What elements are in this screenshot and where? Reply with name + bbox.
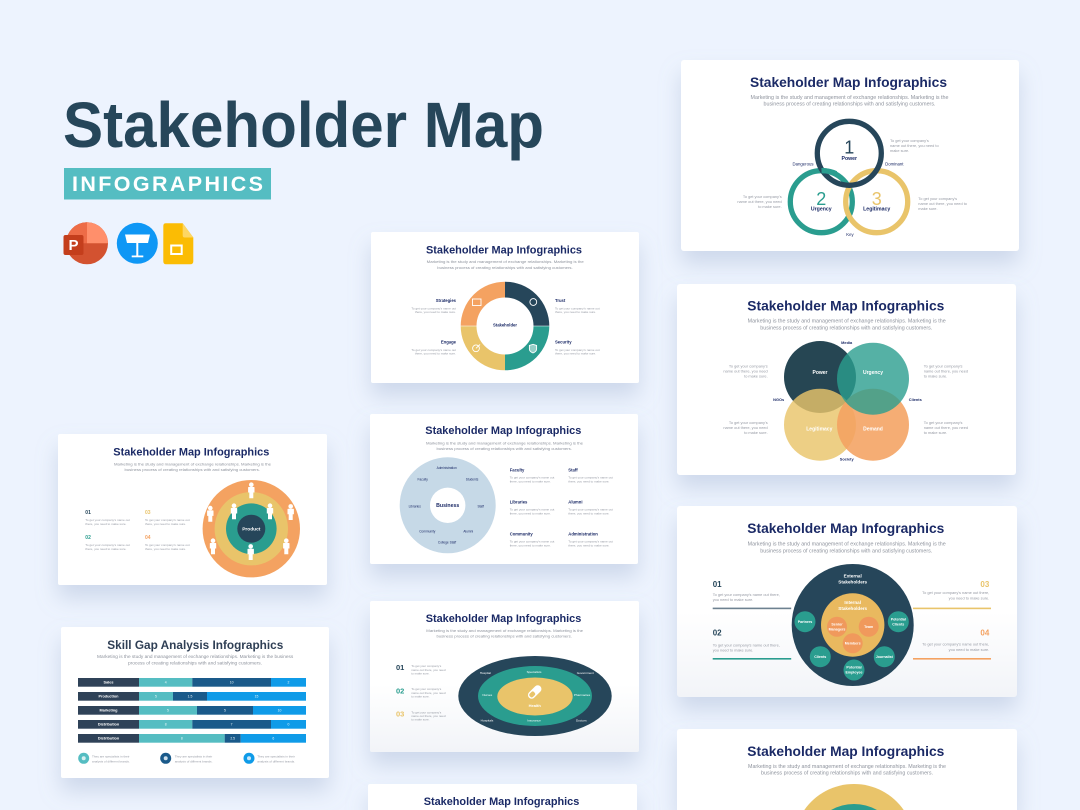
notes: To get your company's xyxy=(918,196,957,201)
item 02: you need to make sure. xyxy=(713,648,753,653)
heading: Stakeholder Map Infographics xyxy=(424,796,579,808)
item 03: you need to make sure. xyxy=(949,596,989,600)
stacked bars: 5 xyxy=(155,695,157,699)
nested ellipses: Government xyxy=(577,671,594,675)
nested circle chart: Partners xyxy=(798,620,812,624)
numbered list xyxy=(396,663,446,722)
donut notes: there, you need to make sure. xyxy=(555,310,596,314)
stacked bars: Marketing xyxy=(100,709,118,713)
stacked bars: 1.5 xyxy=(188,695,192,699)
ring labels: Key xyxy=(846,232,855,237)
legend: analysis of different brands. xyxy=(175,759,213,763)
stacked bars: Distribution xyxy=(98,723,120,727)
stacked bars: Sales xyxy=(104,681,113,685)
ring labels: 2 xyxy=(816,189,826,209)
numbered list: name out there, you need xyxy=(411,691,446,695)
ring labels: Urgency xyxy=(811,206,832,212)
description: business process of creating relationships with and satisfying customers. xyxy=(436,633,572,638)
nested circle chart: Internal xyxy=(844,600,861,605)
stacked bars: Production xyxy=(98,695,119,699)
legend xyxy=(78,753,295,764)
nested circle chart: Clients xyxy=(814,655,826,659)
panel: health ellipses xyxy=(370,601,639,752)
heading: Stakeholder Map Infographics xyxy=(747,520,944,536)
description xyxy=(748,319,946,332)
donut notes: To get your company's name out xyxy=(411,348,456,352)
ring labels: Dominant xyxy=(885,162,904,166)
stakeholder list: Alumni xyxy=(568,500,583,505)
numbered list: to make sure. xyxy=(411,671,430,675)
heading: Stakeholder Map Infographics xyxy=(113,446,269,458)
subtitle badge: INFOGRAPHICS xyxy=(72,172,263,196)
description: Marketing is the study and management of exchange relationships. Marketing is the xyxy=(748,764,946,770)
nested circle chart: Senior xyxy=(831,622,843,626)
concentric circles xyxy=(804,784,904,810)
numbered items: 02 xyxy=(85,535,91,541)
stacked bars: 5 xyxy=(167,709,169,713)
notes: name out there, you need xyxy=(924,368,968,374)
numbered list: name out there, you need xyxy=(411,668,446,672)
ring labels xyxy=(792,138,904,237)
description xyxy=(748,764,946,776)
legend: They are specialists in their xyxy=(92,754,130,758)
heading: Stakeholder Map Infographics xyxy=(426,244,582,256)
heading: Stakeholder Map Infographics xyxy=(747,298,944,314)
numbered items: 04 xyxy=(145,535,151,541)
donut labels: Engage xyxy=(441,340,457,344)
item 02: 02 xyxy=(713,629,722,638)
stakeholder list: Administration xyxy=(568,531,598,536)
panel: donut diagram xyxy=(371,232,639,383)
nested circle chart: Team xyxy=(864,625,873,629)
panel: skill gap bars xyxy=(61,627,329,778)
notes xyxy=(723,364,968,435)
stacked bars: 2.5 xyxy=(230,737,235,741)
stacked bars: 2 xyxy=(288,681,290,685)
notes: name out there, you need xyxy=(723,368,768,374)
panel: cropped bottom centre slide xyxy=(368,784,637,810)
description: business process of creating relationships with and satisfying customers. xyxy=(764,102,936,108)
stakeholder list: To get your company's name out xyxy=(510,507,554,511)
notes: name out there, you need xyxy=(737,199,782,204)
numbered items xyxy=(85,510,190,551)
notes: to make sure. xyxy=(744,430,768,435)
nested circle chart: Stakeholders xyxy=(838,606,868,611)
donut labels xyxy=(436,298,572,344)
notes: to make sure. xyxy=(924,430,947,435)
nested ellipses: Hospital xyxy=(480,671,491,675)
stakeholder list: there, you need to make sure. xyxy=(510,479,551,483)
description: Marketing is the study and management of exchange relationships. Marketing is the xyxy=(427,259,585,264)
description: Marketing is the study and management of exchange relationships. Marketing is the xyxy=(750,95,949,101)
numbered list: To get your company's xyxy=(411,687,442,691)
icon: pill xyxy=(526,684,543,700)
notes: name out there, you need to xyxy=(890,143,939,148)
item 03: 03 xyxy=(980,580,990,589)
icon: PowerPoint xyxy=(64,222,108,264)
notes: To get your company's xyxy=(743,194,782,199)
stacked bars: 15 xyxy=(255,695,258,699)
donut notes xyxy=(411,306,600,356)
notes: To get your company's xyxy=(924,364,963,368)
icon: PowerPoint: P xyxy=(68,237,79,254)
numbered items: To get your company's name out xyxy=(85,518,130,522)
venn labels: Demand xyxy=(863,426,883,432)
notes: To get your company's xyxy=(729,420,768,425)
numbered items: there, you need to make sure. xyxy=(145,547,186,551)
concentric rings xyxy=(203,480,300,577)
wheel: College Staff xyxy=(438,540,456,544)
stacked bars: 8 xyxy=(165,723,167,727)
venn labels: Media xyxy=(841,340,853,345)
nested circle chart: Members xyxy=(845,642,861,646)
venn circles xyxy=(784,341,909,461)
item 03: To get your company's name out there, xyxy=(922,590,989,595)
stakeholder list: there, you need to make sure. xyxy=(568,479,610,483)
nested circle chart: Potential xyxy=(891,618,906,622)
description xyxy=(427,259,585,270)
ring labels: Power xyxy=(842,156,857,162)
notes: To get your company's xyxy=(890,138,929,143)
description: business process of creating relationships with and satisfying customers. xyxy=(124,467,260,472)
ring labels: Dangerous xyxy=(792,162,814,166)
description: process of creating relationships with and satisfying customers. xyxy=(128,660,262,665)
stakeholder list: To get your company's name out xyxy=(510,475,554,479)
stakeholder list: To get your company's name out xyxy=(568,475,613,479)
description xyxy=(97,654,293,665)
description: business process of creating relationships with and satisfying customers. xyxy=(437,265,573,270)
stakeholder list: Faculty xyxy=(510,467,525,472)
nested circle chart: Stakeholders xyxy=(838,580,868,585)
venn labels: Society xyxy=(840,456,854,462)
description: Marketing is the study and management of exchange relationships. Marketing is the xyxy=(426,440,584,445)
panel: three ring diagram xyxy=(681,60,1019,251)
donut notes: To get your company's name out xyxy=(555,306,600,310)
donut chart xyxy=(460,290,550,362)
stakeholder list xyxy=(510,467,613,547)
ring labels: 3 xyxy=(872,189,882,209)
wheel xyxy=(400,457,496,553)
stakeholder list: Community xyxy=(510,531,533,536)
description xyxy=(426,440,584,451)
nested circle chart xyxy=(792,564,914,686)
description xyxy=(114,462,272,472)
description: Marketing is the study and management of exchange relationships. Marketing is the xyxy=(748,319,946,325)
donut labels: Security xyxy=(555,340,572,344)
venn labels: NGOs xyxy=(773,397,784,402)
panel: nested stakeholders xyxy=(677,506,1017,697)
numbered list: to make sure. xyxy=(411,695,430,699)
stakeholder list: Libraries xyxy=(510,500,528,505)
description: Marketing is the study and management of exchange relationships. Marketing is the xyxy=(426,628,584,633)
stakeholder list: To get your company's name out xyxy=(568,507,613,511)
description xyxy=(426,628,584,638)
stakeholder list: To get your company's name out xyxy=(510,539,554,543)
heading: Stakeholder Map Infographics xyxy=(426,613,581,625)
wheel: Alumni xyxy=(463,530,473,534)
item 02 xyxy=(713,629,791,660)
numbered items: To get your company's name out xyxy=(85,543,130,547)
donut notes: To get your company's name out xyxy=(411,306,456,310)
wheel: Libraries xyxy=(409,504,421,508)
donut notes: there, you need to make sure. xyxy=(415,310,456,314)
heading: Stakeholder Map Infographics xyxy=(750,74,947,90)
nested circle chart: External xyxy=(844,574,862,578)
notes: make sure. xyxy=(890,148,909,153)
notes xyxy=(737,138,967,211)
donut notes: To get your company's name out xyxy=(555,348,600,352)
numbered list: To get your company's xyxy=(411,710,442,714)
stacked bars: Distribution xyxy=(98,737,120,741)
nested circle chart: Potential xyxy=(846,666,862,670)
ring labels: 1 xyxy=(844,138,854,158)
stakeholder list: there, you need to make sure. xyxy=(510,511,551,515)
notes: To get your company's xyxy=(924,420,963,425)
donut labels: Strategies xyxy=(436,298,457,303)
item 04: 04 xyxy=(980,629,990,638)
stakeholder list: To get your company's name out xyxy=(568,539,613,543)
wheel: Administration xyxy=(437,466,457,470)
description: business process of creating relationships with and satisfying customers. xyxy=(760,548,932,554)
item 01: you need to make sure. xyxy=(713,597,753,602)
donut notes: there, you need to make sure. xyxy=(415,352,456,356)
numbered list: To get your company's xyxy=(411,664,442,668)
wheel: Staff xyxy=(477,504,484,508)
stakeholder list: there, you need to make sure. xyxy=(510,543,551,547)
nested ellipses xyxy=(458,656,612,736)
heading: Skill Gap Analysis Infographics xyxy=(107,638,284,652)
main title: Stakeholder Map xyxy=(63,89,544,161)
stacked bars: 8 xyxy=(181,737,183,741)
nested ellipses: Nurses xyxy=(482,693,493,697)
donut labels: Stakeholder xyxy=(493,322,517,327)
item 02: To get your company's name out there, xyxy=(713,643,780,648)
stakeholder list: there, you need to make sure. xyxy=(568,543,610,547)
donut notes: there, you need to make sure. xyxy=(555,352,596,356)
stacked bars: 10 xyxy=(230,681,234,685)
description xyxy=(748,542,946,554)
panel: business wheel xyxy=(370,414,638,564)
description xyxy=(750,95,949,108)
stacked bars: 6 xyxy=(272,737,274,741)
numbered items: there, you need to make sure. xyxy=(85,522,127,526)
donut icons xyxy=(472,299,537,353)
notes: name out there, you need to xyxy=(918,201,967,206)
notes: name out there, you need xyxy=(723,425,768,430)
legend: They are specialists in their xyxy=(175,754,212,758)
nested ellipses: Specialists xyxy=(527,670,542,674)
numbered items: To get your company's name out xyxy=(145,518,190,522)
numbered list: to make sure. xyxy=(411,718,430,722)
numbered items: To get your company's name out xyxy=(145,543,190,547)
item 04: To get your company's name out there, xyxy=(922,642,989,647)
notes: to make sure. xyxy=(924,374,947,378)
heading: Stakeholder Map Infographics xyxy=(425,425,581,437)
concentric rings: Product xyxy=(242,526,261,532)
item 03 xyxy=(913,580,991,609)
nested ellipses: Health xyxy=(529,703,541,708)
description: business process of creating relationships with and satisfying customers. xyxy=(761,770,933,776)
rings xyxy=(790,121,908,233)
item 01 xyxy=(713,580,791,609)
nested circle chart: Clients xyxy=(892,623,904,627)
description: business process of creating relationships with and satisfying customers. xyxy=(760,326,932,332)
item 01: 01 xyxy=(713,580,722,589)
venn labels: Power xyxy=(812,370,828,376)
venn labels: Urgency xyxy=(863,370,883,376)
notes: name out there, you need xyxy=(924,425,968,430)
notes: to make sure. xyxy=(758,204,782,209)
donut labels: Trust xyxy=(555,298,566,303)
venn labels: Legitimacy xyxy=(806,426,833,432)
numbered list: 01 xyxy=(396,663,404,672)
description: business process of creating relationships with and satisfying customers. xyxy=(436,446,572,451)
legend: analysis of different brands. xyxy=(257,759,295,763)
item 04 xyxy=(913,629,991,660)
nested circle chart: Journalist xyxy=(876,655,894,659)
wheel: Community xyxy=(419,530,436,534)
item 04: you need to make sure. xyxy=(949,647,989,652)
numbered items: 01 xyxy=(85,510,91,516)
heading: Stakeholder Map Infographics xyxy=(747,743,944,759)
notes: to make sure. xyxy=(744,374,768,378)
stacked bars: 5 xyxy=(224,709,226,713)
nested ellipses: Doctors xyxy=(576,718,587,722)
numbered list: name out there, you need xyxy=(411,714,446,718)
legend: analysis of different brands. xyxy=(92,759,130,763)
nested ellipses: Hospitals xyxy=(481,718,494,722)
wheel: Faculty xyxy=(418,478,428,482)
numbered items: there, you need to make sure. xyxy=(145,522,186,526)
nested ellipses: Pharmacies xyxy=(574,693,591,697)
legend: They are specialists in their xyxy=(257,754,295,758)
stacked bars: 0 xyxy=(288,723,290,727)
wheel: Business xyxy=(436,503,459,509)
ring labels: Legitimacy xyxy=(863,206,890,212)
nested circle chart: Employee xyxy=(846,671,862,675)
numbered list: 02 xyxy=(396,686,404,695)
nested circle chart: Managers xyxy=(829,628,845,632)
description: Marketing is the study and management of exchange relationships. Marketing is the xyxy=(748,542,946,548)
notes: To get your company's xyxy=(729,364,768,368)
panel: product rings xyxy=(58,434,327,585)
panel: four circle venn xyxy=(677,284,1016,475)
panel: cropped bottom right slide xyxy=(677,729,1017,810)
wheel: Students xyxy=(466,478,479,482)
description: Marketing is the study and management of exchange relationships. Marketing is the xyxy=(114,462,272,466)
notes: make sure. xyxy=(918,206,938,211)
description: Marketing is the study and management of exchange relationships. Marketing is the business xyxy=(97,654,293,659)
stacked bars: 10 xyxy=(278,709,281,713)
stakeholder list: there, you need to make sure. xyxy=(568,511,610,515)
icon: Keynote xyxy=(117,223,158,264)
item 01: To get your company's name out there, xyxy=(713,592,780,597)
stacked bars: 4 xyxy=(165,681,167,685)
numbered items: 03 xyxy=(145,510,151,516)
nested ellipses: Insurance xyxy=(527,718,541,722)
stacked bars xyxy=(78,678,306,743)
venn labels: Clients xyxy=(909,397,922,402)
stacked bars: 7 xyxy=(231,723,233,727)
venn labels xyxy=(773,340,922,462)
numbered list: 03 xyxy=(396,709,404,718)
icon: Google Slides xyxy=(163,223,193,264)
numbered items: there, you need to make sure. xyxy=(85,547,127,551)
stakeholder list: Staff xyxy=(568,467,578,472)
